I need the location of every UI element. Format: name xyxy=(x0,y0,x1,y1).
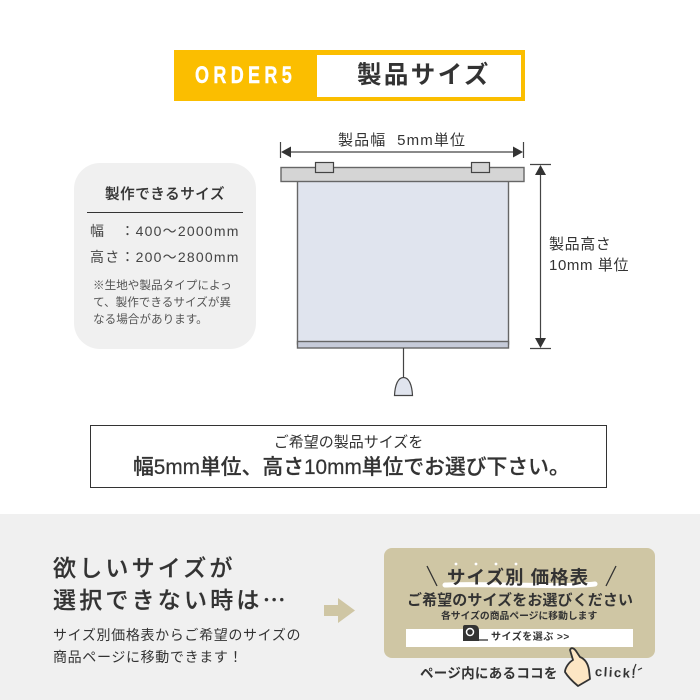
price table card xyxy=(384,548,655,658)
panel title rule xyxy=(87,212,243,213)
bottom heading xyxy=(53,555,286,615)
bottom bar xyxy=(298,342,508,348)
instruction line one: ご希望の製品サイズを xyxy=(274,434,423,451)
height range: 高さ：200～2800mm xyxy=(90,249,240,265)
bottom section background xyxy=(0,514,700,700)
tape measure icon xyxy=(463,625,488,641)
click text: click! xyxy=(595,664,638,681)
note text: て、製作できるサイズが異 xyxy=(93,296,231,308)
panel: available sizes xyxy=(74,163,256,349)
click prompt: ページ内にあるココを xyxy=(420,666,558,681)
blind cloth xyxy=(298,181,508,344)
instruction box xyxy=(90,425,607,488)
note text: ※生地や製品タイプによっ xyxy=(93,278,232,292)
bottom heading: 欲しいサイズが xyxy=(53,555,236,581)
bottom heading: 選択できない時は… xyxy=(53,581,286,615)
height label: 10mm 単位 xyxy=(549,257,629,274)
card small text: 各サイズの商品ページに移動します xyxy=(441,611,597,622)
height label: 製品高さ xyxy=(549,236,611,253)
card decoration xyxy=(426,562,616,588)
height label xyxy=(549,236,629,274)
width range: 幅 ：400～2000mm xyxy=(90,223,240,239)
note text: なる場合があります。 xyxy=(93,312,208,326)
card subtitle: ご希望のサイズをお選びください xyxy=(407,592,633,609)
bottom description xyxy=(53,627,301,664)
heading panel xyxy=(317,55,521,97)
height dimension arrow xyxy=(530,164,551,348)
pull cord xyxy=(402,348,404,378)
roller blind diagram xyxy=(280,142,551,396)
bottom description: サイズ別価格表からご希望のサイズの xyxy=(53,627,301,643)
button label: サイズを選ぶ >> xyxy=(491,632,570,643)
headrail xyxy=(281,168,524,182)
bottom description: 商品ページに移動できます！ xyxy=(53,648,243,664)
header banner xyxy=(174,50,525,101)
right bracket xyxy=(472,162,490,172)
card title: サイズ別 価格表 xyxy=(447,567,589,588)
left bracket xyxy=(316,162,334,172)
pull weight xyxy=(394,378,412,396)
width label: 製品幅 5mm単位 xyxy=(338,132,466,149)
width dimension arrow xyxy=(280,142,524,158)
card button xyxy=(406,629,633,647)
order label: ORDER5 xyxy=(195,62,296,89)
instruction line two: 幅5mm単位、高さ10mm単位でお選び下さい。 xyxy=(133,456,570,479)
heading text: 製品サイズ xyxy=(357,62,491,89)
note text xyxy=(93,278,232,326)
panel title: 製作できるサイズ xyxy=(105,187,225,203)
